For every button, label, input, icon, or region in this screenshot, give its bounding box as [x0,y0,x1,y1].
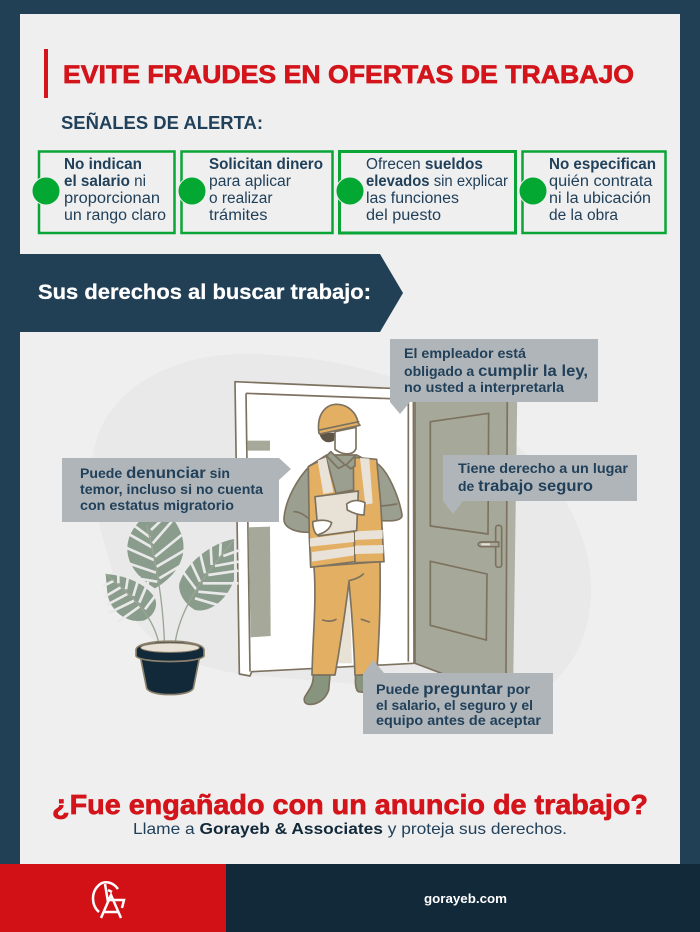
shirt [308,455,382,537]
callout: denunciar: temor, incluso si no cuenta [80,482,264,497]
panel: alert sign 4 [519,152,666,233]
gap between legs [337,583,352,663]
footer: website block [226,864,700,932]
panel: alert sign 4: quién contrata [549,173,653,190]
panel: alert sign 4: No especifican [549,156,656,173]
illustration: door and worker [235,382,517,704]
panel: alert sign 3: elevados sin explicar [366,173,508,190]
title: EVITE FRAUDES EN OFERTAS DE TRABAJO [63,61,634,89]
collar [327,452,355,469]
title [44,49,634,98]
panel: alert sign 2: para aplicar [209,173,291,190]
panel: alert sign 2: Solicitan dinero [209,156,323,173]
callout: trabajo seguro [443,455,637,514]
callout: denunciar: Puede denunciar sin [80,465,230,482]
vest [308,457,355,567]
panel: alert sign 2: trámites [209,207,268,224]
leaf: top [120,518,185,588]
panel: alert sign 1: proporcionan [64,190,160,207]
call to action subtext: Llame a Gorayeb & Associates y proteja sus derechos. [133,821,567,838]
boots [304,675,330,704]
panel: alert sign 3 [336,152,516,233]
illustration: potted plant [103,518,240,695]
icon: GA logo [93,882,124,918]
banner: sus derechos: Sus derechos al buscar trabajo: [38,281,371,304]
panel: alert sign 4: de la obra [549,207,618,224]
heading: señales de alerta: SEÑALES DE ALERTA: [61,112,263,133]
panel: alert sign 3: del puesto [366,207,441,224]
footer: website block: gorayeb.com [424,891,507,906]
pot [136,641,204,695]
panel: alert sign 1: un rango claro [64,207,166,224]
panel: alert sign 2: o realizar [209,190,272,207]
door [415,390,517,674]
panel: alert sign 1: No indican [64,156,142,173]
footer: logo block [0,864,226,932]
clipboard [315,491,358,536]
panel: alert sign 1 [32,152,174,233]
callout: cumplir la ley: obligado a cumplir la ley, [404,363,588,380]
leaf: left [103,572,158,622]
door frame [235,382,414,676]
callout: denunciar [62,458,291,522]
panel: alert sign 1: el salario ni [64,173,146,190]
callout: preguntar: Puede preguntar por [376,681,531,698]
callout: preguntar [363,660,553,734]
callout: trabajo seguro: de trabajo seguro [458,478,593,495]
callout: cumplir la ley: El empleador está [404,346,527,361]
callout: denunciar: con estatus migratorio [80,498,234,513]
callout: preguntar: el salario, el seguro y el [376,698,533,713]
pants [312,562,380,675]
face [335,427,356,454]
callout: cumplir la ley [390,339,598,414]
banner: sus derechos [20,254,403,332]
callout: cumplir la ley: no usted a interpretarla [404,380,565,395]
right arm [364,463,402,521]
panel: alert sign 4: ni la ubicación [549,190,651,207]
panel: alert sign 3: Ofrecen sueldos [366,156,483,173]
left arm [284,465,320,532]
helmet [318,404,360,434]
hands [313,520,332,535]
callout: trabajo seguro: Tiene derecho a un lugar [458,461,629,476]
stems [106,525,234,649]
callout: preguntar: equipo antes de aceptar [376,713,542,728]
call to action heading: ¿Fue engañado con un anuncio de trabajo? [52,789,648,820]
worker [284,404,402,704]
leaf: right [179,539,240,611]
illustration background blob [92,354,591,690]
hair [319,433,335,442]
panel: alert sign 2 [178,152,332,233]
panel: alert sign 3: las funciones [366,190,459,207]
